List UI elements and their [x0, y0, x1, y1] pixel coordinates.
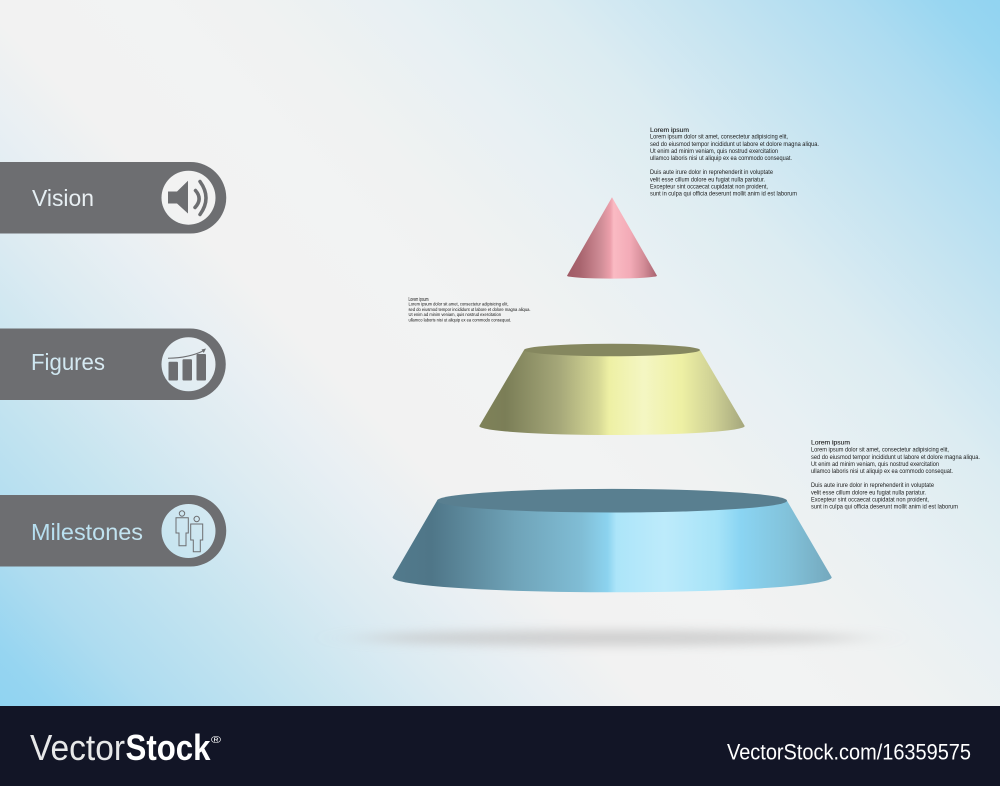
Vision text: Vision [32, 185, 94, 211]
text block: top: Lorem ipsum dolor sit amet, consectetur adipisicing elit, [650, 134, 788, 141]
yellow top face [524, 344, 700, 356]
text block: bottom: Lorem ipsum [811, 440, 850, 446]
VectorStock logo: ® [211, 735, 222, 746]
Milestones pill [0, 495, 226, 566]
text block: bottom: Excepteur sint occaecat cupidatat non proident, [811, 496, 929, 503]
text block: top: Ut enim ad minim veniam, quis nostrud exercitation [650, 148, 779, 155]
text block: bottom: Duis aute irure dolor in reprehenderit in voluptate [811, 482, 935, 489]
text block: top [650, 127, 819, 198]
text block: middle [408, 297, 530, 324]
text block: top: Lorem ipsum [650, 127, 689, 134]
text block: bottom: velit esse cillum dolore eu fugiat nulla pariatur. [811, 489, 926, 496]
text block: middle: sed do eiusmod tempor incididunt ut labore et dolore magna aliqua. [408, 307, 530, 313]
text block: middle: ullamco laboris nisi ut aliquip ex ea commodo consequat. [408, 318, 511, 324]
text block: bottom: sed do eiusmod tempor incididunt ut labore et dolore magna aliqua. [811, 454, 980, 461]
panel: Milestones label [0, 495, 226, 566]
panel: Figures label [0, 328, 226, 400]
footer bar [0, 706, 1000, 786]
icon: bar chart [162, 337, 216, 391]
ground shadow [362, 630, 862, 646]
panel: Vision label [0, 162, 226, 234]
text block: bottom: Lorem ipsum dolor sit amet, consectetur adipisicing elit, [811, 447, 949, 454]
text block: bottom: Ut enim ad minim veniam, quis nostrud exercitation [811, 461, 940, 468]
text block: middle: Lorem ipsum dolor sit amet, consectetur adipisicing elit, [408, 302, 508, 308]
pyramid: red cone [567, 197, 657, 279]
text block: top: Duis aute irure dolor in reprehenderit in voluptate [650, 169, 774, 176]
text block: middle: Lorem ipsum [408, 297, 429, 303]
text block: top: sunt in culpa qui officia deserunt mollit anim id est laborum [650, 190, 797, 198]
image id: VectorStock.com/16359575 [727, 740, 971, 764]
VectorStock logo [30, 727, 222, 768]
Milestones text: Milestones [31, 519, 143, 545]
text block: bottom [811, 440, 980, 510]
text block: top: Excepteur sint occaecat cupidatat non proident, [650, 183, 768, 190]
VectorStock logo: Vector [30, 727, 125, 768]
blue top face [437, 489, 787, 512]
Figures text: Figures [31, 349, 105, 375]
Vision pill [0, 162, 226, 234]
pyramid: yellow frustum [479, 344, 745, 435]
text block: bottom: ullamco laboris nisi ut aliquip ex ea commodo consequat. [811, 468, 953, 475]
icon: speaker [162, 171, 216, 225]
text block: bottom: sunt in culpa qui officia deserunt mollit anim id est laborum [811, 504, 958, 510]
text block: top: ullamco laboris nisi ut aliquip ex ea commodo consequat. [650, 155, 792, 162]
text block: top: sed do eiusmod tempor incididunt ut labore et dolore magna aliqua. [650, 141, 819, 148]
text block: middle: Ut enim ad minim veniam, quis nostrud exercitation [408, 312, 501, 318]
Figures pill [0, 328, 226, 400]
VectorStock logo: Stock [126, 727, 211, 768]
icon: people [162, 504, 216, 558]
pyramid: blue frustum [392, 489, 832, 592]
text block: top: velit esse cillum dolore eu fugiat nulla pariatur. [650, 176, 765, 183]
